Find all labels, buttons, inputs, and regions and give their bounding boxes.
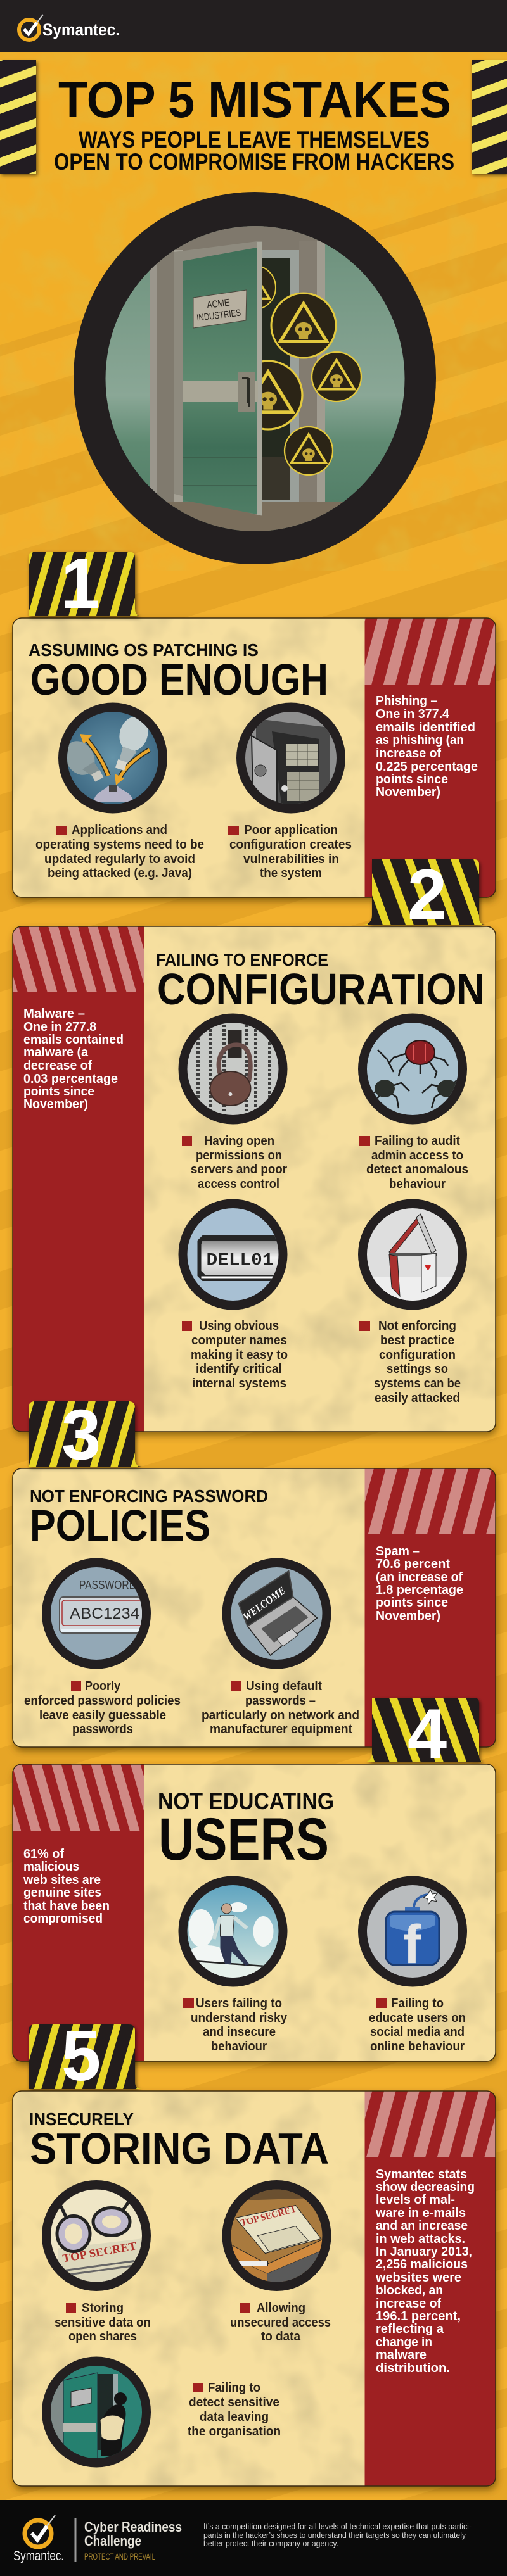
stat: Symantec summary: 2,256 malicious (376, 2257, 468, 2271)
stat: malware: Malware – (23, 1007, 85, 1021)
stat: phishing: Phishing – (376, 694, 437, 708)
stat: spam: (an increase of (376, 1570, 463, 1584)
icon: password field (42, 1558, 151, 1669)
door sign (193, 290, 247, 328)
stat: Symantec summary: distribution. (376, 2361, 450, 2375)
stat: malicious web sites: web sites are (23, 1873, 101, 1887)
icon: footer Symantec logo: Symantec. (13, 2549, 64, 2563)
stat: malicious web sites: that have been (23, 1899, 110, 1913)
heading 5: STORING DATA (30, 2124, 329, 2173)
caption 5c: the organisation (188, 2425, 281, 2439)
footer challenge title: PROTECT AND PREVAIL (84, 2551, 155, 2561)
heading 1: GOOD ENOUGH (30, 655, 328, 704)
stat: Symantec summary: show decreasing (376, 2180, 475, 2194)
stat: phishing: points since (376, 773, 448, 786)
caption 2d: systems can be (374, 1377, 461, 1391)
hero illustration: open door with threats (74, 192, 436, 564)
caption 2a: permissions on (196, 1149, 282, 1163)
icon: spiders (358, 1013, 467, 1125)
number tab 4: 4 (408, 1695, 447, 1774)
caption 2c: making it easy to (191, 1348, 288, 1362)
caption 3a: enforced password policies (24, 1694, 181, 1708)
number tab 2: 2 (408, 855, 447, 934)
caption 1a (35, 823, 204, 880)
icon: secret document on desk (222, 2180, 331, 2291)
number tab 4 (363, 1695, 485, 1774)
icon: Symantec check logo (19, 15, 43, 40)
caption 2b: Failing to audit (375, 1134, 460, 1148)
icon: secret document on desk: TOP SECRET (240, 2204, 297, 2228)
caption 2d: best practice (380, 1334, 454, 1348)
stat: Symantec summary: in web attacks. (376, 2232, 465, 2246)
icon: facebook bomb (358, 1876, 467, 1987)
stat: spam: November) (376, 1609, 440, 1623)
icon: thief leaving through door (42, 2357, 151, 2467)
title: WAYS PEOPLE LEAVE THEMSELVES (79, 127, 430, 153)
caption 1a: updated regularly to avoid (44, 852, 195, 866)
heading 4 (158, 1788, 334, 1873)
stat: spam: 70.6 percent (376, 1557, 450, 1571)
icon: password field: PASSWORD (79, 1579, 136, 1591)
door (174, 241, 262, 516)
badge: skull hazard sign (285, 427, 333, 475)
footer description: pants in the hacker’s shoes to understand their targets so they can ultimately (203, 2530, 466, 2540)
stat: malware: November) (23, 1097, 88, 1111)
caption 4b: educate users on (369, 2011, 466, 2025)
hazard block right (472, 60, 507, 174)
stat: Symantec summary: In January 2013, (376, 2245, 472, 2259)
caption 2d: easily attacked (375, 1391, 460, 1405)
caption 2c: identify critical (196, 1362, 282, 1376)
caption 2d: configuration (379, 1348, 456, 1362)
icon: facebook bomb: f (403, 1914, 421, 1975)
stat: Symantec summary: blocked, an (376, 2283, 443, 2297)
number tab 1 (29, 544, 143, 623)
icon: password field: ABC1234 (70, 1605, 139, 1622)
caption 4a: and insecure (203, 2025, 276, 2039)
heading 4: NOT EDUCATING (158, 1788, 334, 1814)
panel 3: password policies (13, 1468, 496, 1747)
door sign: ACME (206, 298, 230, 311)
stat: Symantec summary: reflecting a (376, 2322, 444, 2336)
caption 2a: servers and poor (191, 1163, 287, 1177)
caption 3b: manufacturer equipment (210, 1722, 352, 1736)
caption 4a: behaviour (211, 2040, 267, 2054)
icon: laptop: WELCOME (241, 1584, 288, 1623)
caption 2d (359, 1319, 461, 1405)
caption 1b: Poor application (244, 823, 338, 837)
title: TOP 5 MISTAKES (58, 72, 451, 129)
caption 1b (228, 823, 352, 880)
badge: skull hazard sign (262, 266, 276, 309)
heading 5: INSECURELY (29, 2109, 134, 2129)
stat: Symantec summary: levels of mal- (376, 2193, 455, 2207)
heading 4: USERS (158, 1806, 329, 1873)
caption 2a: Having open (204, 1134, 274, 1148)
stat: malicious web sites (23, 1847, 110, 1926)
caption 2d: Not enforcing (378, 1319, 456, 1333)
caption 2a: access control (198, 1177, 279, 1191)
caption 3b (202, 1679, 359, 1736)
heading 1: ASSUMING OS PATCHING IS (29, 640, 259, 660)
hazard block left (0, 60, 36, 174)
caption 4a (183, 1997, 288, 2054)
panel 1: OS patching (13, 618, 496, 897)
logo wordmark: Symantec. (42, 20, 120, 39)
caption 5a: sensitive data on (55, 2316, 151, 2330)
caption 3a: Poorly (85, 1679, 121, 1693)
stat: malware: emails contained (23, 1033, 124, 1047)
icon: magnifying glasses on secret document (42, 2180, 151, 2291)
stat: Symantec summary: malware (376, 2348, 427, 2362)
caption 5b: Allowing (257, 2301, 305, 2315)
stat: malware (23, 1007, 124, 1111)
heading 2: FAILING TO ENFORCE (156, 950, 328, 969)
icon: DELL01 nameplate (179, 1199, 288, 1310)
caption 5b: unsecured access (230, 2316, 331, 2330)
stat: spam: Spam – (376, 1544, 420, 1558)
stat: malware: malware (a (23, 1045, 89, 1059)
heading 3: NOT ENFORCING PASSWORD (30, 1486, 268, 1506)
caption 2c: Using obvious (199, 1319, 279, 1333)
caption 2c (182, 1319, 288, 1391)
caption 1b: configuration creates (229, 838, 352, 852)
icon: man on tightrope (179, 1876, 288, 1987)
number tab 5 (29, 2016, 143, 2095)
icon: light bulbs (58, 703, 167, 813)
caption 3a (24, 1679, 181, 1736)
icon: open safe (236, 703, 345, 813)
stat: spam: points since (376, 1596, 448, 1610)
caption 5c: data leaving (200, 2410, 269, 2424)
icon: footer Symantec logo (13, 2515, 64, 2563)
stat: malicious web sites: 61% of (23, 1847, 64, 1861)
caption 1b: vulnerabilities in (243, 852, 339, 866)
icon: laptop (222, 1558, 331, 1669)
stat: malware: One in 277.8 (23, 1020, 96, 1034)
sidebar 5 (365, 2091, 496, 2486)
caption 1a: being attacked (e.g. Java) (48, 866, 192, 880)
caption 2b: behaviour (389, 1177, 446, 1191)
caption 4a: understand risky (191, 2011, 288, 2025)
caption 4b (369, 1997, 466, 2054)
caption 4b: online behaviour (370, 2040, 465, 2054)
sidebar 3 (365, 1468, 496, 1747)
caption 1b: the system (260, 866, 322, 880)
caption 5c: Failing to (208, 2381, 260, 2395)
stat: Symantec summary: ware in e-mails (375, 2206, 466, 2220)
stat: phishing: as phishing (an (376, 733, 464, 747)
sidebar 2 (13, 926, 144, 1432)
stat: Symantec summary (375, 2168, 475, 2375)
caption 2c: computer names (191, 1334, 287, 1348)
footer challenge title (84, 2519, 182, 2561)
caption 3b: Using default (246, 1679, 322, 1693)
badge: skull hazard sign (262, 360, 304, 431)
stat: Symantec summary: change in (376, 2335, 432, 2349)
stat: malicious web sites: genuine sites (23, 1886, 101, 1900)
stat: phishing: 0.225 percentage (376, 760, 478, 774)
footer challenge title: Challenge (84, 2533, 141, 2549)
stat: Symantec summary: increase of (376, 2297, 441, 2311)
icon: padlock (179, 1013, 288, 1125)
caption 4a: Users failing to (196, 1997, 282, 2011)
title (54, 72, 454, 175)
number tab 2 (363, 855, 485, 934)
stat: Symantec summary: and an increase (376, 2219, 468, 2233)
number tab 1: 1 (61, 544, 100, 623)
heading 1 (29, 640, 328, 704)
caption 5a: open shares (68, 2330, 137, 2344)
caption 3b: particularly on network and (202, 1708, 359, 1722)
stat: malicious web sites: compromised (23, 1912, 103, 1926)
badge: skull hazard sign (312, 352, 361, 401)
door sign: INDUSTRIES (196, 308, 241, 324)
caption 5a: Storing (82, 2301, 124, 2315)
heading 3: POLICIES (30, 1501, 210, 1550)
footer (0, 2500, 507, 2576)
stat: phishing: increase of (376, 747, 441, 761)
stat: spam: 1.8 percentage (376, 1583, 463, 1597)
number tab 3: 3 (61, 1395, 101, 1474)
stat: malicious web sites: malicious (23, 1860, 79, 1874)
caption 1a: operating systems need to be (35, 838, 204, 852)
caption 3b: passwords – (245, 1694, 316, 1708)
footer description: better protect their company or agency. (203, 2539, 338, 2548)
footer description: It’s a competition designed for all levels of technical expertise that puts partici- (203, 2522, 472, 2531)
stat: phishing (376, 694, 478, 799)
badge: skull hazard sign (271, 293, 336, 358)
stat: spam (376, 1544, 463, 1623)
caption 4b: Failing to (391, 1997, 444, 2011)
stat: phishing: November) (376, 785, 440, 799)
sidebar 4 (13, 1764, 144, 2061)
footer description (203, 2522, 472, 2548)
number tab 3 (29, 1395, 143, 1474)
caption 2b: detect anomalous (366, 1163, 468, 1177)
caption 5b (230, 2301, 331, 2344)
stat: Symantec summary: Symantec stats (376, 2168, 467, 2181)
stat: Symantec summary: 196.1 percent, (376, 2309, 461, 2323)
caption 2c: internal systems (192, 1377, 286, 1391)
sidebar 1 (365, 618, 496, 897)
icon: magnifying glasses on secret document: TOP SECRET (61, 2239, 138, 2264)
caption 5a (55, 2301, 151, 2344)
caption 2b (359, 1134, 468, 1191)
heading 3 (30, 1486, 268, 1550)
header bar (0, 0, 507, 52)
icon: DELL01 nameplate: DELL01 (207, 1251, 274, 1270)
panel 4: educating users (13, 1764, 496, 2061)
panel 2: configuration (13, 926, 496, 1432)
caption 4b: social media and (370, 2025, 465, 2039)
caption 3a: leave easily guessable (39, 1708, 166, 1722)
stat: phishing: emails identified (376, 721, 475, 735)
caption 3a: passwords (72, 1722, 133, 1736)
stat: Symantec summary: websites were (375, 2271, 461, 2285)
caption 5c: detect sensitive (189, 2396, 279, 2409)
panel 5: storing data (13, 2091, 496, 2486)
caption 2b: admin access to (371, 1149, 463, 1163)
caption 1a: Applications and (72, 823, 167, 837)
caption 2d: settings so (387, 1362, 448, 1376)
number tab 5: 5 (61, 2016, 101, 2095)
caption 5c (188, 2381, 281, 2439)
icon: house of cards (358, 1199, 467, 1310)
stat: malware: 0.03 percentage (23, 1072, 118, 1086)
stat: phishing: One in 377.4 (376, 707, 450, 721)
stat: malware: points since (23, 1085, 94, 1099)
footer challenge title: Cyber Readiness (84, 2519, 182, 2535)
caption 2a (182, 1134, 287, 1191)
caption 5b: to data (261, 2330, 301, 2344)
icon: house of cards: ♥ (425, 1261, 432, 1273)
stat: malware: decrease of (23, 1059, 92, 1073)
